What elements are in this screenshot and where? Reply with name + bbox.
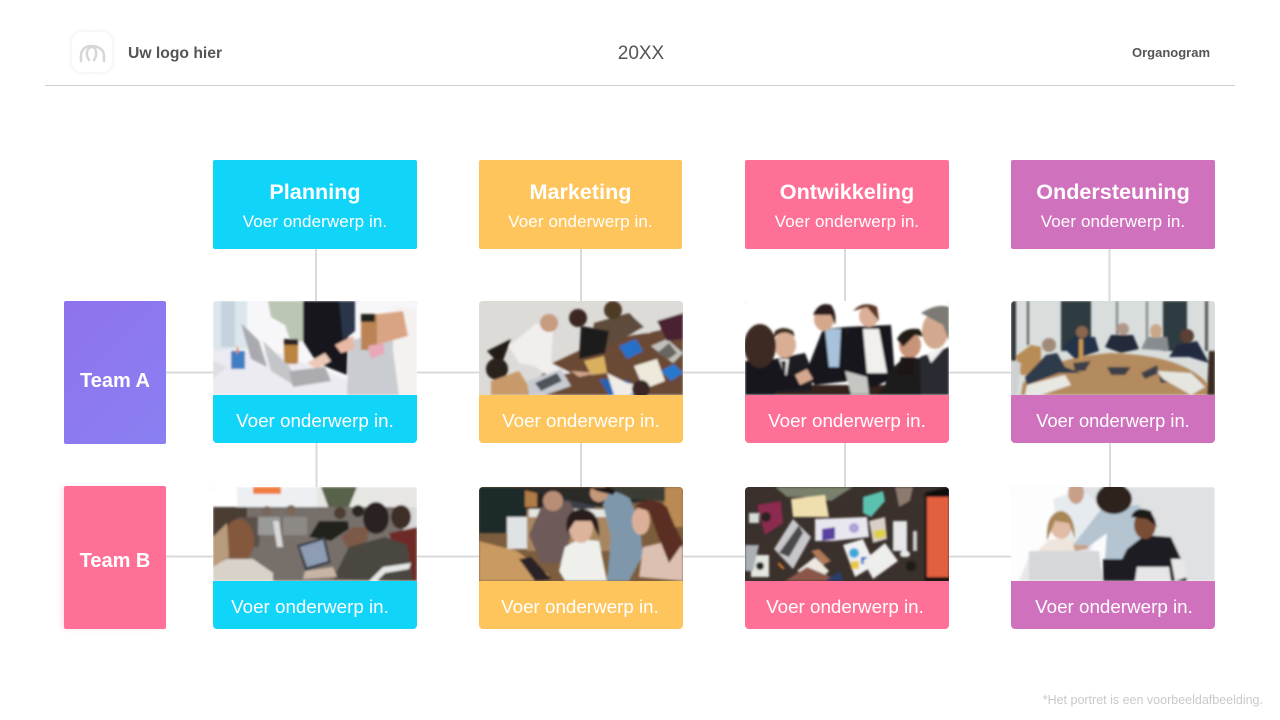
column heading: Planning: Planning [269, 179, 361, 204]
card: Team A Ondersteuning [1011, 301, 1215, 443]
column heading: Ondersteuning: Ondersteuning [1036, 179, 1190, 204]
column heading: Marketing [479, 160, 682, 249]
photo: office desk with coffee [213, 301, 417, 395]
column heading: Planning [213, 160, 417, 249]
card: Team B Marketing [479, 487, 683, 629]
label: Voer onderwerp in. [231, 596, 389, 617]
logo text: Uw logo hier [128, 45, 222, 62]
logo icon [72, 32, 112, 72]
label: Voer onderwerp in. [1036, 410, 1190, 431]
label: Voer onderwerp in. [1035, 596, 1193, 617]
label: Voer onderwerp in. [502, 410, 660, 431]
photo: colleagues around a laptop [479, 487, 683, 581]
column heading: Planning: Voer onderwerp in. [243, 212, 387, 231]
label: Voer onderwerp in. [766, 596, 924, 617]
card: Team A Planning [213, 301, 417, 443]
column heading: Ontwikkeling [745, 160, 949, 249]
photo: team looking at laptop [1011, 487, 1215, 581]
year: 20XX [618, 43, 664, 64]
card: Team B Planning [213, 487, 417, 629]
column heading: Ontwikkeling: Ontwikkeling [780, 179, 914, 204]
card: Team B Ondersteuning [1011, 487, 1215, 629]
photo: team around wooden table from above [479, 301, 683, 395]
card: Team A Ontwikkeling [745, 301, 949, 443]
photo: business people shaking hands [745, 301, 949, 395]
label: Voer onderwerp in. [768, 410, 926, 431]
row heading: Team A [64, 301, 166, 444]
column heading: Marketing: Voer onderwerp in. [508, 212, 653, 231]
column heading: Marketing: Marketing [530, 179, 632, 204]
column heading: Ontwikkeling: Voer onderwerp in. [775, 212, 919, 231]
header rule [45, 85, 1235, 86]
photo: conference room with laptops [213, 487, 417, 581]
label: Voer onderwerp in. [236, 410, 394, 431]
row heading: Team B [64, 486, 166, 629]
card: Team A Marketing [479, 301, 683, 443]
column heading: Ondersteuning [1011, 160, 1215, 249]
row heading: Team A: Team A [80, 370, 150, 392]
label: Voer onderwerp in. [501, 596, 659, 617]
column heading: Ondersteuning: Voer onderwerp in. [1041, 212, 1185, 231]
row heading: Team B: Team B [80, 550, 150, 572]
footnote: *Het portret is een voorbeeldafbeelding. [1043, 693, 1263, 707]
card: Team B Ontwikkeling [745, 487, 949, 629]
photo: boardroom meeting round table [1011, 301, 1215, 395]
photo: flat lay of desk with laptop and charts [745, 487, 949, 581]
page title: Organogram [1132, 45, 1210, 60]
